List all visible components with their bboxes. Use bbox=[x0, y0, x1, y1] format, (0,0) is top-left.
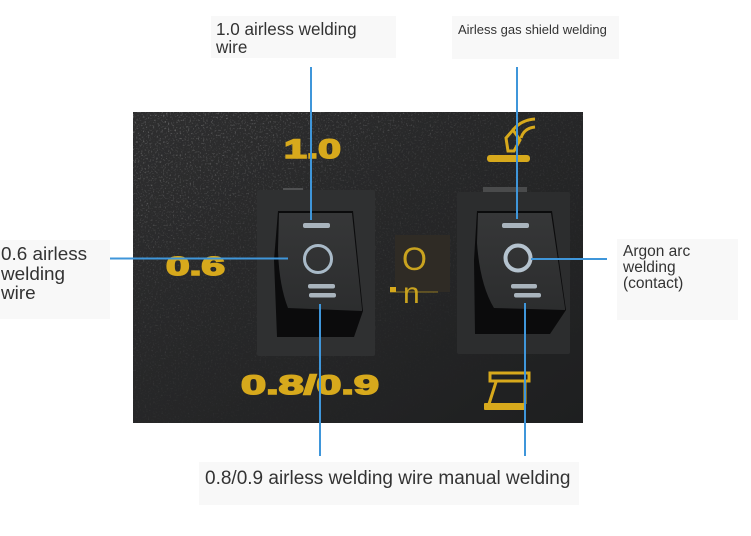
callout: On indicator: n bbox=[403, 277, 420, 310]
label: 0.8/0.9 airless welding wire manual welding: 0.8/0.9 airless welding wire manual welding bbox=[205, 468, 570, 489]
label: 0.6 airless welding wire: 0.6 airless bbox=[1, 244, 87, 265]
label: 1.0 airless welding wire: wire bbox=[216, 38, 247, 57]
label: 0.6 airless welding wire bbox=[0, 240, 110, 319]
label: 0.6 airless welding wire: welding bbox=[1, 264, 65, 284]
panel: dark device photo bbox=[133, 112, 583, 423]
label: 0.8/0.9 airless welding wire manual welding bbox=[199, 462, 579, 505]
label: argon arc welding (contact): welding bbox=[623, 259, 676, 276]
label: airless gas shield welding: Airless gas shield welding bbox=[458, 22, 607, 37]
label: argon arc welding (contact) bbox=[617, 239, 738, 320]
label: 1.0 airless welding wire bbox=[211, 16, 396, 58]
icon: gas shield torch bbox=[487, 119, 535, 162]
label: 1.0 marking: 1.0 bbox=[284, 134, 341, 164]
label: argon arc welding (contact): (contact) bbox=[623, 275, 683, 292]
label: 1.0 airless welding wire: 1.0 airless welding bbox=[216, 20, 357, 39]
label: 0.6 marking: 0.6 bbox=[166, 251, 225, 281]
switch: left rocker bbox=[257, 188, 375, 356]
label: 0.8/0.9 marking: 0.8/0.9 bbox=[241, 370, 379, 400]
switch: right rocker bbox=[457, 187, 570, 354]
label: airless gas shield welding bbox=[452, 16, 619, 59]
label: 0.6 airless welding wire: wire bbox=[1, 283, 36, 304]
icon: manual welding electrode holder bbox=[484, 373, 529, 410]
callout: On indicator: O bbox=[402, 241, 427, 277]
leader lines bbox=[110, 67, 607, 456]
label: argon arc welding (contact): Argon arc bbox=[623, 243, 690, 260]
callout: On indicator bbox=[390, 235, 450, 310]
diagram: photo of switches with leader lines bbox=[110, 67, 607, 456]
